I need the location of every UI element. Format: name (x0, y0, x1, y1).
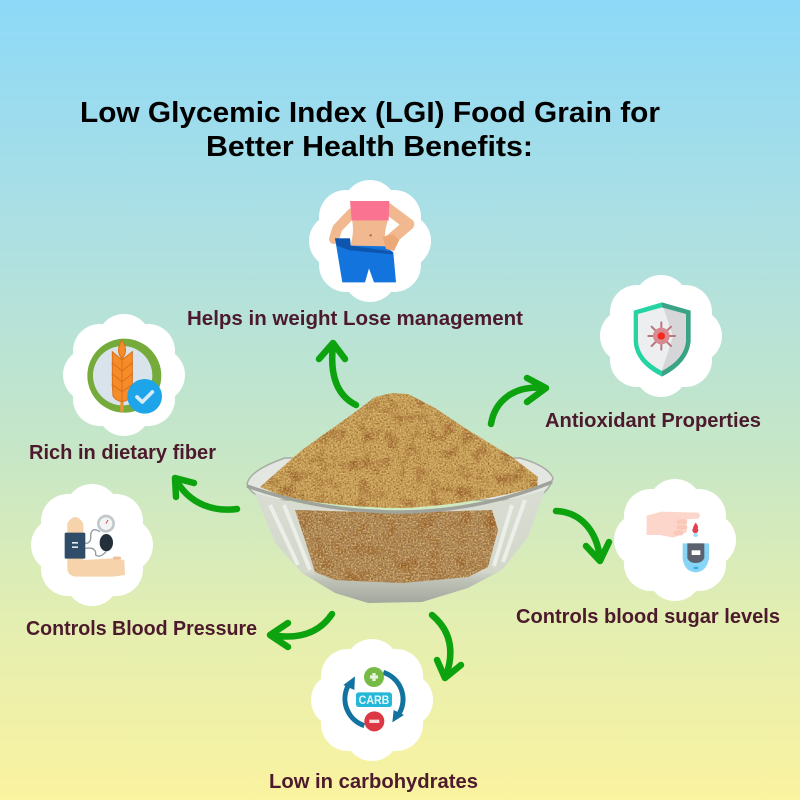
title: Better Health Benefits: (206, 131, 533, 163)
label: dietary fiber: Rich in dietary fiber (29, 442, 216, 464)
icon: wheat badge (87, 339, 162, 414)
title (80, 97, 660, 163)
glass rim front (247, 482, 552, 512)
benefit: dietary fiber (63, 314, 185, 436)
glass rim back (247, 458, 553, 500)
label: blood pressure: Controls Blood Pressure (26, 618, 257, 640)
icon: blood pressure cuff (65, 515, 125, 577)
arrow: to weight management (319, 343, 356, 405)
glass bowl body (255, 490, 545, 603)
bowl of grain (247, 393, 553, 603)
icon: waist and loose jeans (334, 201, 409, 282)
arrow: to dietary fiber (175, 478, 237, 510)
icon: finger and glucose meter (647, 512, 709, 572)
glass flutes (270, 500, 525, 570)
arrow: to blood pressure (270, 614, 332, 647)
arrow: to blood sugar (556, 511, 609, 561)
icon: carb cycle: CARB (359, 693, 390, 707)
grain mound (260, 393, 538, 508)
label: antioxidant: Antioxidant Properties (545, 410, 761, 432)
arrow: to carbohydrates (432, 615, 461, 678)
grain inside bowl (295, 510, 498, 583)
label: weight management: Helps in weight Lose management (187, 308, 523, 330)
benefit: low carbohydrates (311, 639, 433, 761)
benefit: antioxidant (600, 275, 722, 397)
label: low carbohydrates: Low in carbohydrates (269, 771, 478, 793)
icon: shield with virus (634, 302, 691, 377)
benefit: blood pressure (31, 484, 153, 606)
benefit: weight management (309, 180, 431, 302)
benefit: blood sugar (614, 479, 736, 601)
title: Low Glycemic Index (LGI) Food Grain for (80, 97, 660, 129)
arrow: to antioxidant (491, 378, 546, 424)
label: blood sugar: Controls blood sugar levels (516, 606, 780, 628)
